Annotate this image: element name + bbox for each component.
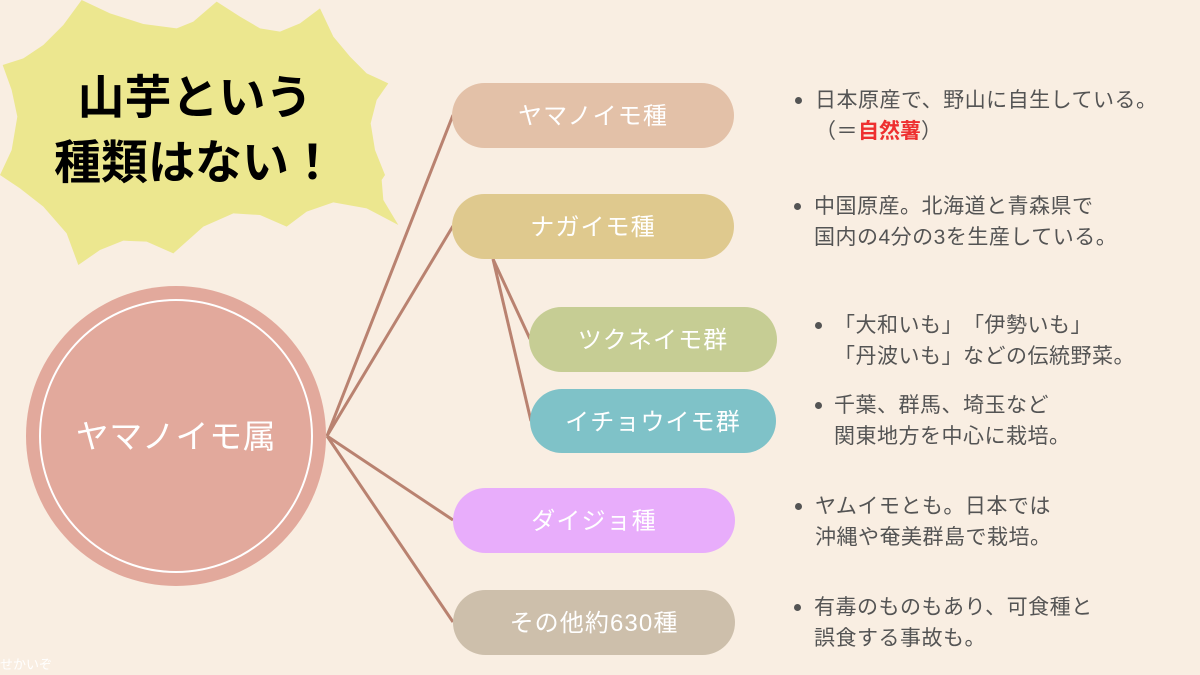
text: ナガイモ種: 国内の4分の3を生産している。 [814, 226, 1117, 248]
pill: ツクネイモ群: ツクネイモ群 [578, 327, 728, 354]
pill: ツクネイモ群 [529, 307, 777, 372]
text: ヤマノイモ種 [795, 89, 1158, 142]
text: ツクネイモ群: 「大和いも」「伊勢いも」 [834, 314, 1092, 337]
pill: その他約630種: その他約630種 [510, 610, 678, 637]
pill: その他約630種 [453, 590, 735, 655]
text: その他約630種: 有毒のものもあり、可食種と [814, 596, 1093, 619]
watermark: せかいぞ [0, 657, 52, 672]
text: ヤマノイモ種: 日本原産で、野山に自生している。 [815, 89, 1158, 112]
text: ヤマノイモ種: （＝自然薯） [815, 120, 942, 142]
text: イチョウイモ群 [815, 394, 1070, 448]
text: ダイジョ種: ヤムイモとも。日本では [815, 495, 1051, 518]
text: ツクネイモ群: 「丹波いも」などの伝統野菜。 [834, 344, 1135, 368]
text: ツクネイモ群 [815, 314, 1135, 368]
text: ナガイモ種: 中国原産。北海道と青森県で [814, 195, 1094, 218]
pill: ダイジョ種: ダイジョ種 [531, 508, 657, 535]
pill: ダイジョ種 [453, 488, 735, 553]
inner ring [39, 299, 313, 573]
circle label: ヤマノイモ属 [76, 418, 276, 455]
text: その他約630種: 誤食する事故も。 [814, 626, 986, 650]
title: 種類はない！ [54, 136, 336, 188]
pill: イチョウイモ群: イチョウイモ群 [565, 409, 741, 436]
title: 山芋という [78, 71, 312, 124]
title [54, 71, 336, 188]
text: ナガイモ種 [794, 195, 1117, 248]
pill: ヤマノイモ種: ヤマノイモ種 [518, 103, 668, 130]
text: ダイジョ種 [795, 495, 1052, 548]
pill: イチョウイモ群 [530, 389, 776, 453]
pill: ヤマノイモ種 [452, 83, 734, 148]
pill: ナガイモ種: ナガイモ種 [530, 214, 656, 241]
starburst callout [0, 0, 398, 265]
pill: ナガイモ種 [452, 194, 734, 259]
text: イチョウイモ群: 千葉、群馬、埼玉など [834, 394, 1049, 417]
text: イチョウイモ群: 関東地方を中心に栽培。 [834, 424, 1070, 448]
main circle [26, 286, 326, 586]
text: ダイジョ種: 沖縄や奄美群島で栽培。 [815, 526, 1052, 548]
text: その他約630種 [794, 596, 1093, 650]
